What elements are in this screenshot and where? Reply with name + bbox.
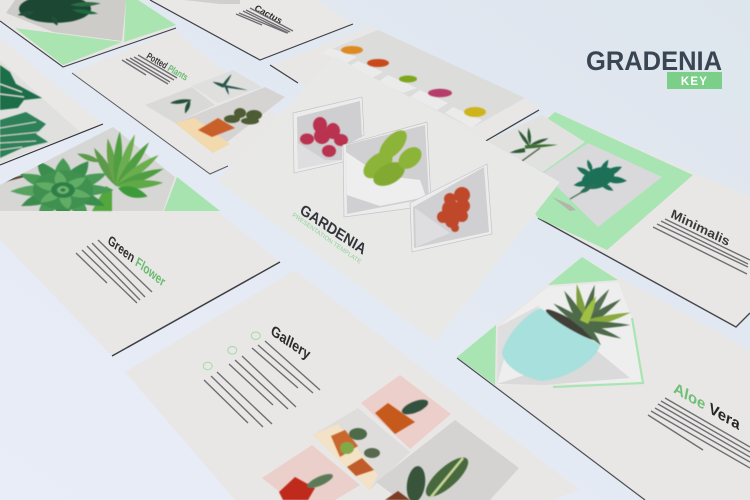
photo: fan leaf plant	[76, 131, 165, 211]
photo: tall cactus	[376, 420, 519, 500]
heading: Minimalis: Minimalis	[669, 207, 732, 249]
title: GARDENIA: GARDENIA	[297, 201, 369, 259]
photo: red pot	[262, 445, 360, 500]
panel: cactus slide	[150, 0, 353, 60]
panel: minimalis slide	[440, 112, 750, 327]
photo frame: red cactus	[410, 164, 492, 252]
photo: cream pots	[313, 408, 410, 490]
photo backdrop	[497, 282, 643, 385]
green triangle top	[548, 257, 618, 285]
photo: orange pot	[175, 87, 285, 153]
panel: potted plants slide	[72, 30, 300, 174]
panel: main cover slide	[217, 56, 560, 342]
plant photo	[17, 0, 101, 27]
photo: leafy plant	[543, 143, 662, 227]
pedestals	[322, 48, 482, 128]
panel: top-left plant slide	[0, 0, 176, 67]
green frame	[500, 112, 693, 250]
heading: Potted Plants: Potted Plants	[145, 51, 189, 84]
heading: Aloe Vera: Aloe Vera	[672, 379, 742, 434]
green shape lower	[15, 28, 122, 65]
logo badge text: KEY	[681, 76, 708, 88]
heading: Green Flower: Green Flower	[106, 232, 168, 290]
coloured cacti	[341, 46, 486, 117]
teal pot	[502, 308, 600, 381]
green shape right	[124, 0, 176, 42]
heading: Cactus: Cactus	[253, 3, 284, 26]
bullet icons	[203, 332, 260, 370]
panel: aloe vera slide	[457, 257, 750, 500]
photo: small plant left	[145, 87, 215, 123]
heading: Gallery: Gallery	[269, 323, 312, 364]
photo: pink cactus	[361, 375, 451, 449]
photo frame: pink cactus	[293, 97, 364, 173]
green triangle	[164, 177, 220, 211]
logo badge	[667, 72, 722, 89]
text lines	[648, 398, 750, 468]
photo: branch	[486, 115, 585, 172]
logo wordmark: GRADENIA	[586, 46, 722, 76]
text lines	[76, 240, 152, 303]
green triangle left	[457, 325, 496, 385]
logo: GRADENIA KEY	[586, 46, 722, 89]
photo frame: green cactus	[343, 122, 431, 217]
text lines	[236, 8, 293, 33]
photo: rosette succulent	[4, 158, 114, 211]
aloe plant	[544, 283, 632, 348]
panel: green flower slide	[0, 127, 280, 356]
subtitle: PRESENTATION TEMPLATE	[291, 212, 362, 266]
text lines	[204, 341, 320, 427]
text lines	[122, 55, 177, 84]
panel: gallery slide	[125, 270, 580, 500]
panel: colour cactus row slide	[270, 27, 541, 142]
photo: small plant right	[192, 70, 262, 103]
monstera leaves	[0, 65, 48, 158]
panel: monstera slide	[0, 38, 103, 165]
text lines	[653, 219, 750, 274]
green outline	[553, 318, 643, 387]
